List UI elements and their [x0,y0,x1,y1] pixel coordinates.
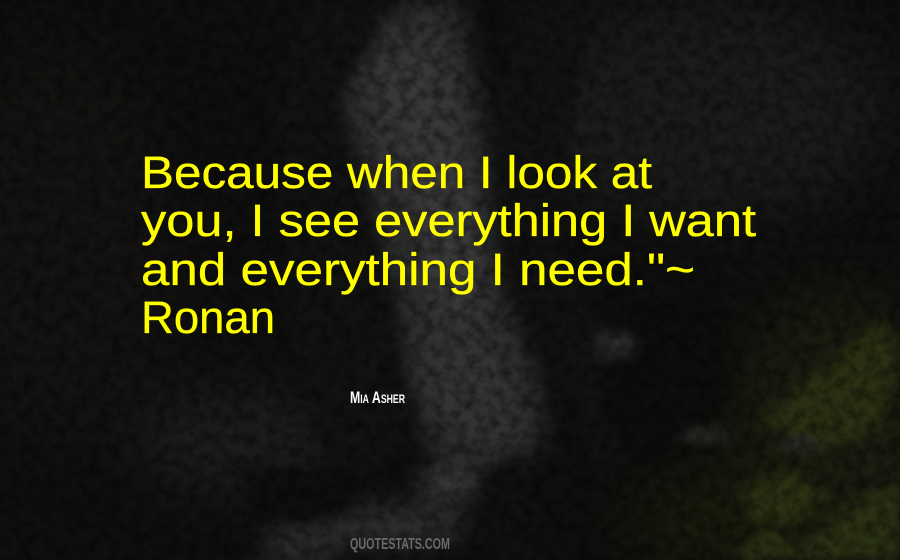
watermark: QUOTESTATS.COM [350,536,450,553]
quote line 2: you, I see everything I want [141,195,757,246]
quote line 1: Because when I look at [141,147,653,198]
quote line 4: Ronan [141,292,275,343]
foliage: olive tree branches, lower right [730,320,900,560]
author name: Mia Asher [350,388,405,407]
quote text [141,147,757,343]
quote line 3: and everything I need."~ [141,244,695,295]
